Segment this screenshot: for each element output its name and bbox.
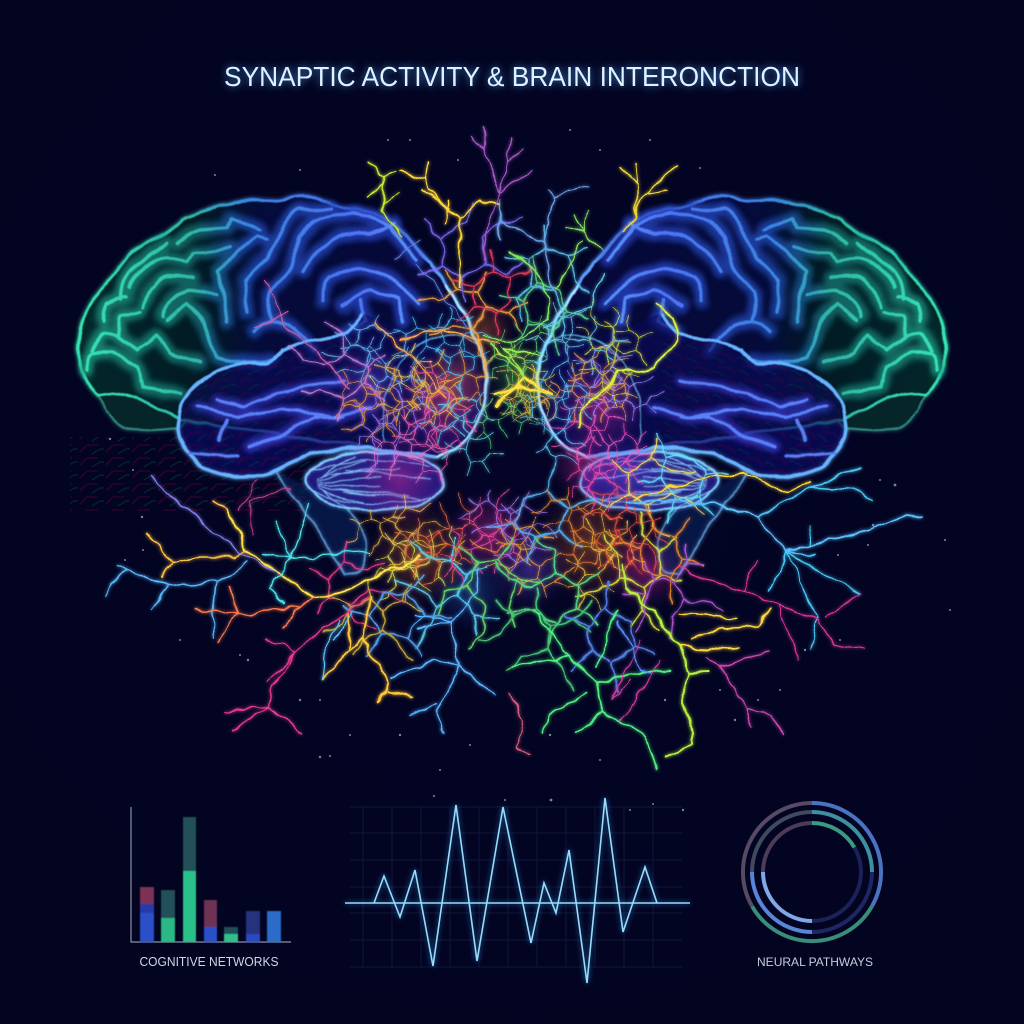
ring label: NEURAL PATHWAYS [757, 955, 873, 969]
panel: neural pathways ring chart [743, 803, 881, 969]
cerebellum fibres [312, 457, 430, 508]
temporal lobe folds [190, 380, 370, 457]
cortex folds [87, 210, 420, 393]
upper centre neurons [253, 125, 677, 427]
temporal fold glow [197, 380, 370, 447]
lower frontal underside [98, 393, 200, 430]
dense neural tangle [283, 195, 732, 704]
concentric rings [743, 803, 881, 941]
left brain hemisphere [79, 197, 486, 575]
chart axes [131, 807, 291, 942]
temporal lobe fill [178, 313, 485, 477]
colour glow clouds [328, 300, 685, 630]
cortex fold glow [87, 210, 420, 393]
temporal lobe texture [178, 333, 363, 477]
bars [140, 817, 281, 942]
chart label: COGNITIVE NETWORKS [140, 955, 278, 969]
panel: cognitive networks bar chart [131, 807, 291, 969]
background stars [109, 129, 951, 811]
lower right neurons [510, 467, 923, 767]
brainstem [277, 472, 366, 575]
cerebral cortex silhouette [79, 197, 486, 457]
title: SYNAPTIC ACTIVITY & BRAIN INTERONCTION [224, 61, 800, 92]
right brain hemisphere [538, 197, 945, 575]
lower left neurons [107, 477, 495, 735]
inner lobe arc [382, 334, 478, 440]
waveform trace [345, 798, 690, 983]
waveform grid [350, 807, 682, 967]
neuron branches [107, 125, 923, 767]
faint red and green noise texture [70, 437, 310, 511]
temporal lobe outline [178, 313, 437, 477]
cerebellum [307, 452, 443, 510]
panel: waveform chart [345, 798, 690, 983]
bright inner rim [437, 285, 486, 457]
